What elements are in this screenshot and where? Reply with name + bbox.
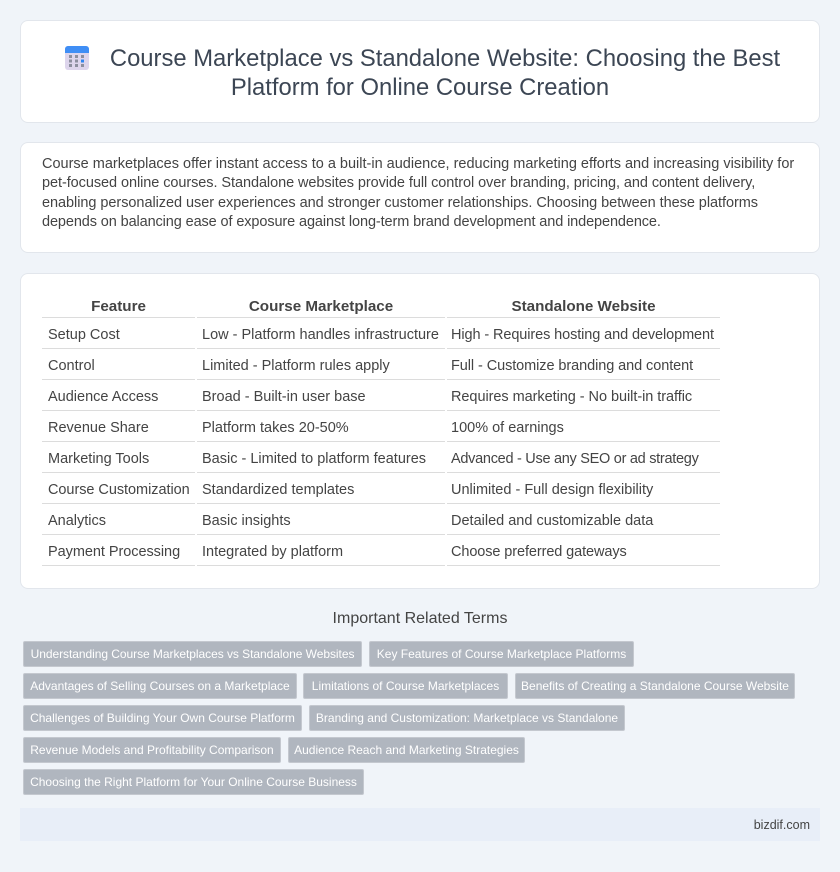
comparison table (42, 298, 720, 566)
footer site name: bizdif.com (754, 818, 810, 832)
panel: comparison table (20, 273, 820, 589)
intro paragraph: enabling personalized user experiences and stronger customer relationships. Choosing between these platforms (42, 195, 758, 211)
comparison table: Requires marketing - No built-in traffic (451, 389, 692, 405)
title: Course Marketplace vs Standalone Website: Choosing the Best (110, 45, 780, 72)
title (110, 45, 780, 101)
comparison table: Control (48, 358, 95, 374)
comparison table: High - Requires hosting and development (451, 327, 714, 343)
comparison table: Standardized templates (202, 482, 354, 498)
comparison table: Limited - Platform rules apply (202, 358, 390, 374)
intro paragraph: pet-focused online courses. Standalone websites provide full control over branding, pricing, and content delivery, (42, 175, 755, 191)
intro paragraph (42, 156, 794, 230)
footer (20, 808, 820, 841)
related terms heading: Important Related Terms (333, 610, 507, 627)
comparison table: Payment Processing (48, 544, 180, 560)
related terms tags: Challenges of Building Your Own Course Platform (30, 711, 295, 725)
header panel (20, 20, 820, 123)
related terms tags: Understanding Course Marketplaces vs Standalone Websites (31, 647, 354, 661)
comparison table: Course Customization (48, 482, 190, 498)
comparison table: Advanced - Use any SEO or ad strategy (451, 451, 699, 467)
panel: intro text (20, 142, 820, 253)
icon: calendar (65, 46, 89, 70)
comparison table: Full - Customize branding and content (451, 358, 693, 374)
comparison table: Revenue Share (48, 420, 149, 436)
comparison table: Marketing Tools (48, 451, 149, 467)
related terms tags: Key Features of Course Marketplace Platforms (377, 647, 626, 661)
comparison table: Broad - Built-in user base (202, 389, 366, 405)
comparison table: Low - Platform handles infrastructure (202, 327, 439, 343)
related terms tags: Audience Reach and Marketing Strategies (294, 743, 519, 757)
comparison table: Audience Access (48, 389, 158, 405)
table header: Course Marketplace (249, 298, 393, 315)
related terms tags: Benefits of Creating a Standalone Course Website (521, 679, 789, 693)
comparison table: Detailed and customizable data (451, 513, 653, 529)
related terms tags: Limitations of Course Marketplaces (312, 679, 499, 693)
related terms tags: Branding and Customization: Marketplace vs Standalone (316, 711, 618, 725)
comparison table: 100% of earnings (451, 420, 564, 436)
table header: Feature (91, 298, 146, 315)
comparison table: Basic insights (202, 513, 291, 529)
comparison table: Platform takes 20-50% (202, 420, 349, 436)
comparison table: Basic - Limited to platform features (202, 451, 426, 467)
related terms tags: Advantages of Selling Courses on a Marketplace (30, 679, 290, 693)
comparison table: Setup Cost (48, 327, 120, 343)
related terms tags (23, 641, 795, 795)
table header: Standalone Website (511, 298, 656, 315)
comparison table: Integrated by platform (202, 544, 343, 560)
title: Platform for Online Course Creation (231, 74, 609, 101)
intro paragraph: depends on balancing ease of exposure against long-term brand development and independence. (42, 214, 661, 230)
comparison table: Unlimited - Full design flexibility (451, 482, 653, 498)
intro paragraph: Course marketplaces offer instant access to a built-in audience, reducing marketing efforts and increasing visibility for (42, 156, 794, 172)
table header (91, 298, 656, 315)
comparison table: Analytics (48, 513, 106, 529)
comparison table: Choose preferred gateways (451, 544, 627, 560)
related terms tags: Choosing the Right Platform for Your Online Course Business (30, 775, 357, 789)
related terms tags: Revenue Models and Profitability Comparison (30, 743, 274, 757)
